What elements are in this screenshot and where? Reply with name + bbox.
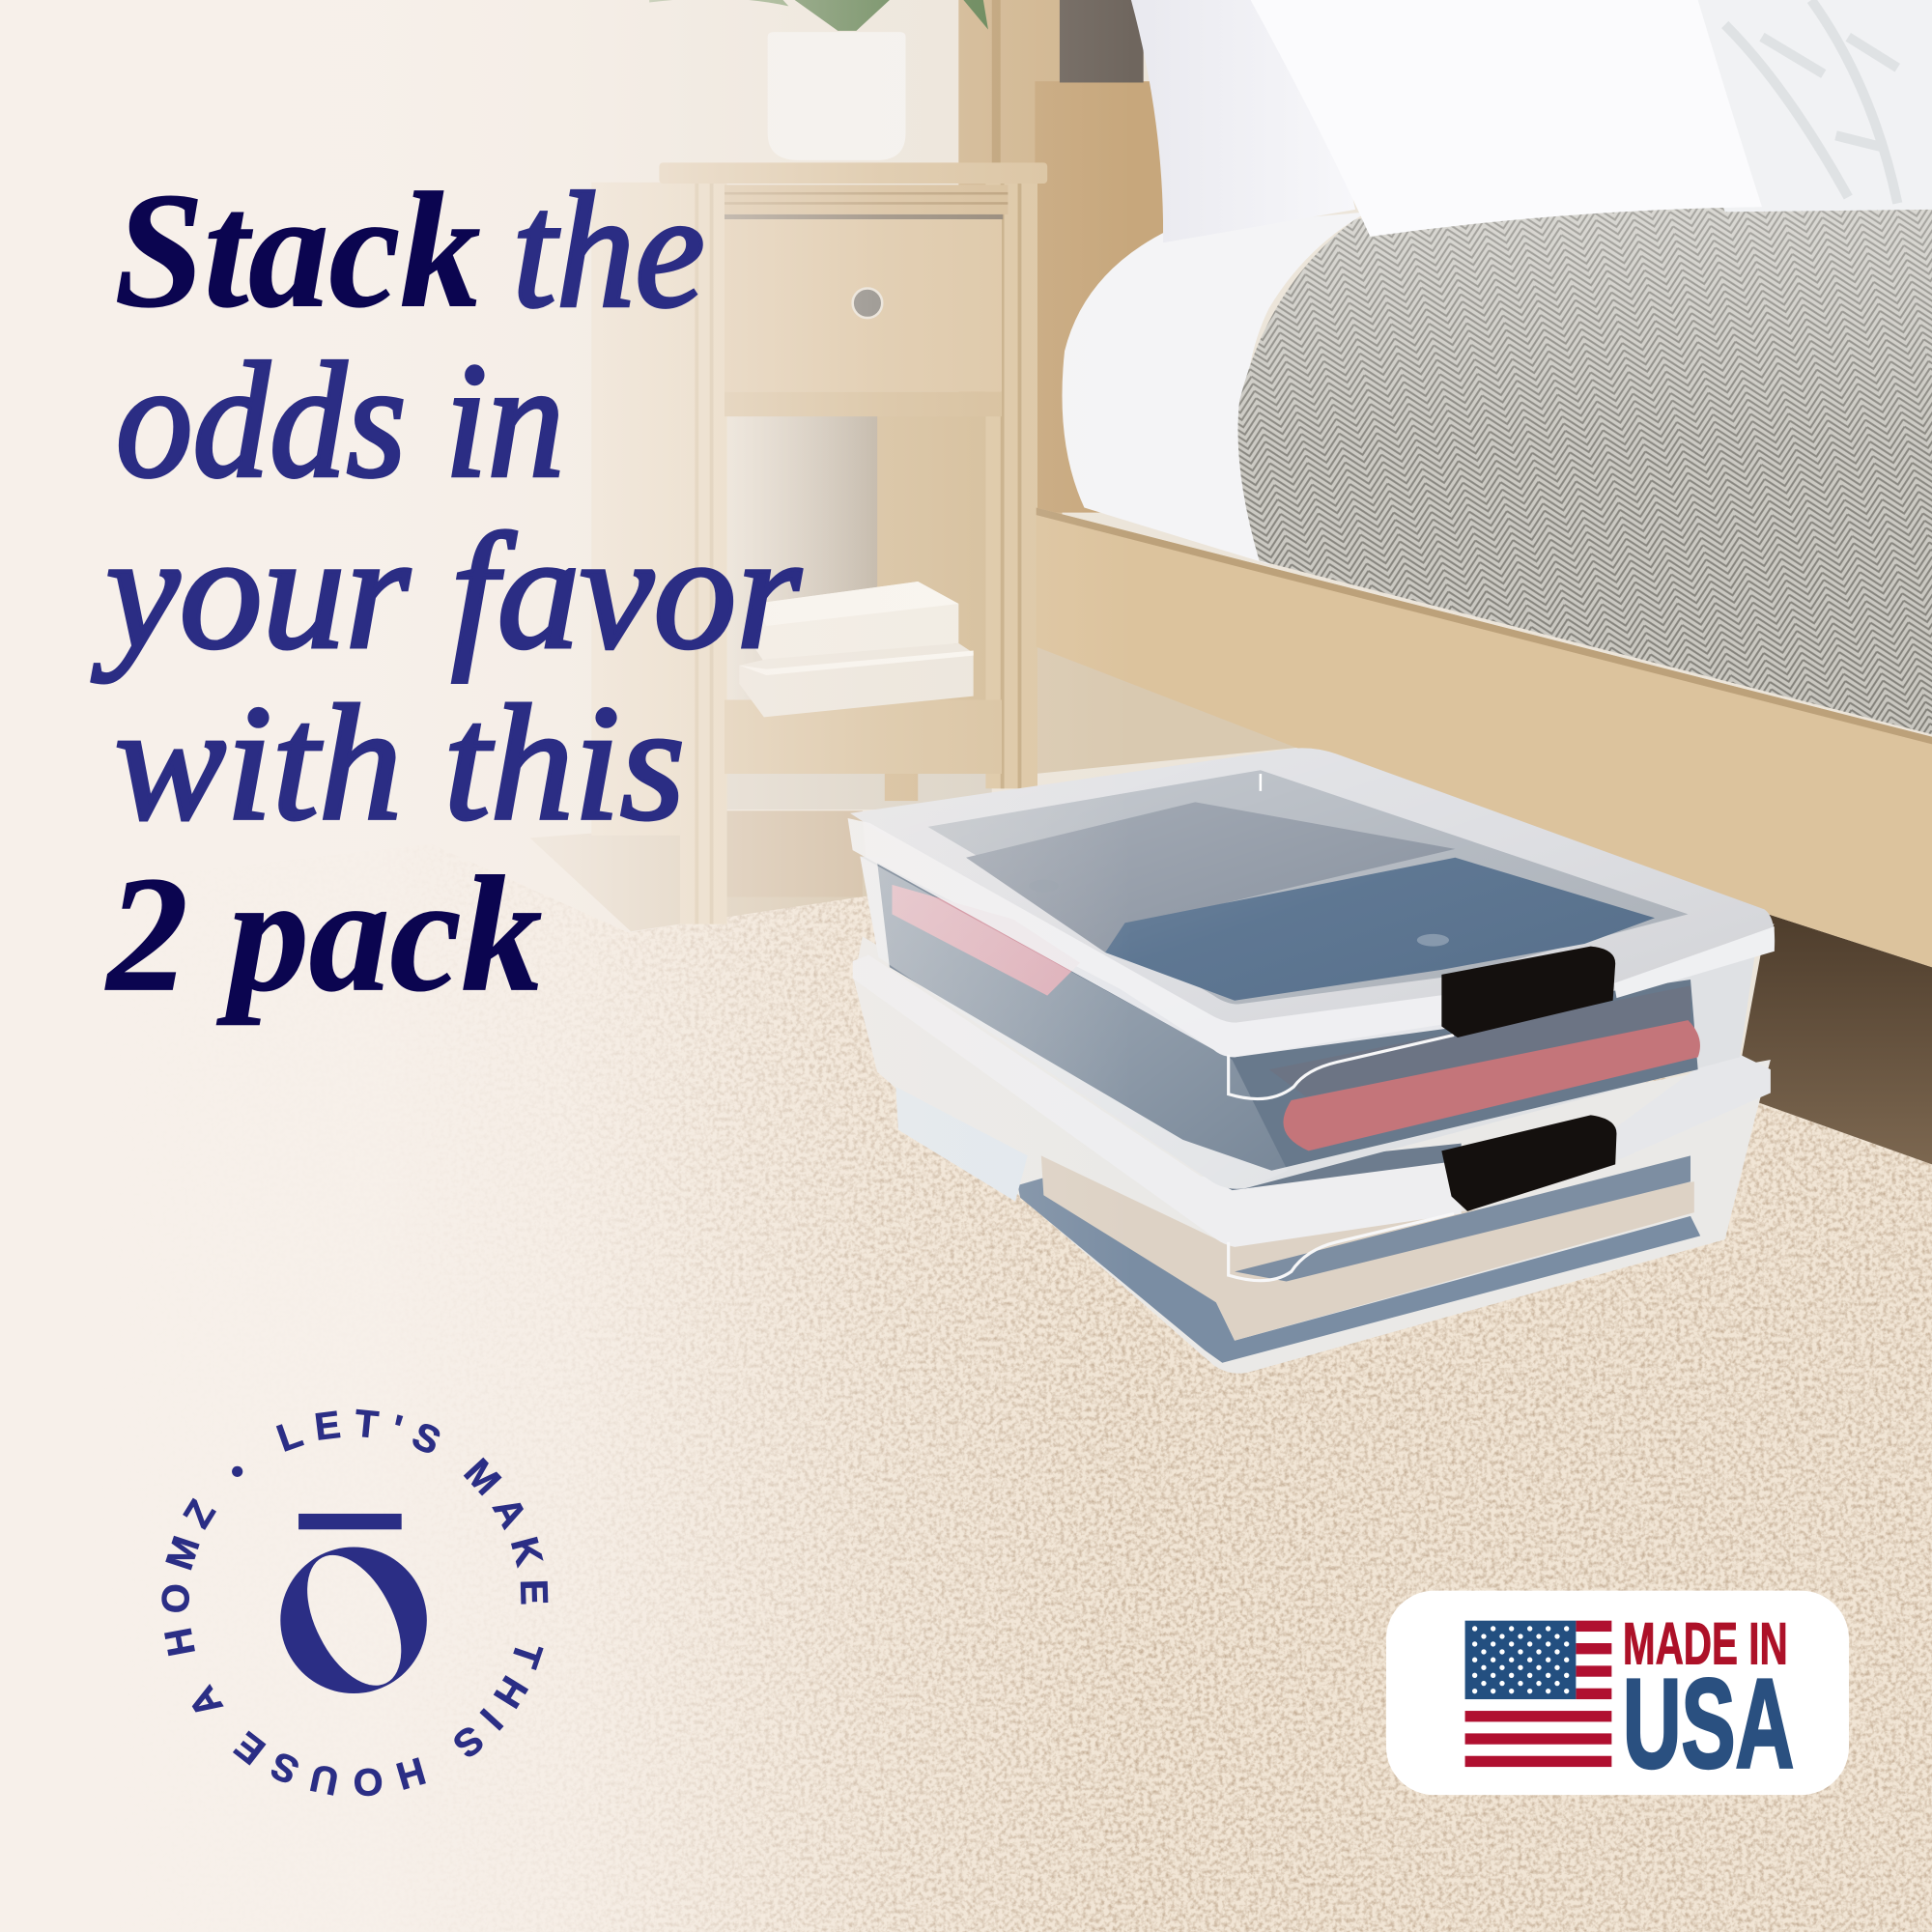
upper box body bbox=[860, 856, 1775, 1189]
dark space under the bed bbox=[1735, 914, 1932, 1164]
upper box contents bbox=[860, 856, 1700, 1189]
badge background bbox=[1386, 1591, 1849, 1795]
seal dot bbox=[232, 1466, 242, 1477]
headline word: the: the bbox=[513, 158, 705, 341]
herringbone blanket bbox=[1238, 207, 1932, 734]
american flag bbox=[1465, 1621, 1611, 1767]
badge text: USA: USA bbox=[1623, 1652, 1794, 1794]
headline line: your favor: your favor bbox=[92, 500, 803, 683]
lower box lid bbox=[853, 955, 1771, 1281]
potted plant bbox=[649, 0, 988, 160]
logo bar bbox=[298, 1514, 402, 1529]
dark floor under the nightstand bbox=[529, 813, 868, 931]
plastic storage boxes bbox=[848, 748, 1775, 1374]
upper black latch bbox=[1441, 947, 1615, 1037]
carpet floor bbox=[468, 882, 1932, 1932]
made in USA badge bbox=[1386, 1591, 1849, 1795]
headline bbox=[92, 158, 803, 1025]
soft cream fade over the left side bbox=[0, 0, 1133, 1932]
lower box contents bbox=[895, 1087, 1700, 1363]
logo ring letter bbox=[280, 1548, 427, 1693]
stacked books bbox=[739, 582, 974, 717]
headline line: with this: with this bbox=[115, 671, 685, 854]
back wall under the bed bbox=[1035, 640, 1306, 774]
bed side rail bbox=[1037, 508, 1932, 967]
headline line: odds in: odds in bbox=[116, 328, 564, 511]
upper box lid bbox=[848, 748, 1775, 1099]
circular slogan: LET'S MAKE THIS HOUSE A HOMZ bbox=[161, 1408, 549, 1797]
headline word: Stack: Stack bbox=[115, 158, 480, 341]
nightstand bbox=[591, 162, 1047, 924]
brand seal logo bbox=[161, 1408, 549, 1797]
lower box body bbox=[854, 936, 1771, 1374]
bed headboard bbox=[958, 0, 1163, 518]
white mattress sheet bbox=[1062, 212, 1368, 564]
badge text: MADE IN: MADE IN bbox=[1623, 1611, 1788, 1677]
white pillows bbox=[1131, 0, 1932, 242]
lower black latch bbox=[1441, 1115, 1616, 1211]
headline line: 2 pack: 2 pack bbox=[104, 842, 542, 1025]
